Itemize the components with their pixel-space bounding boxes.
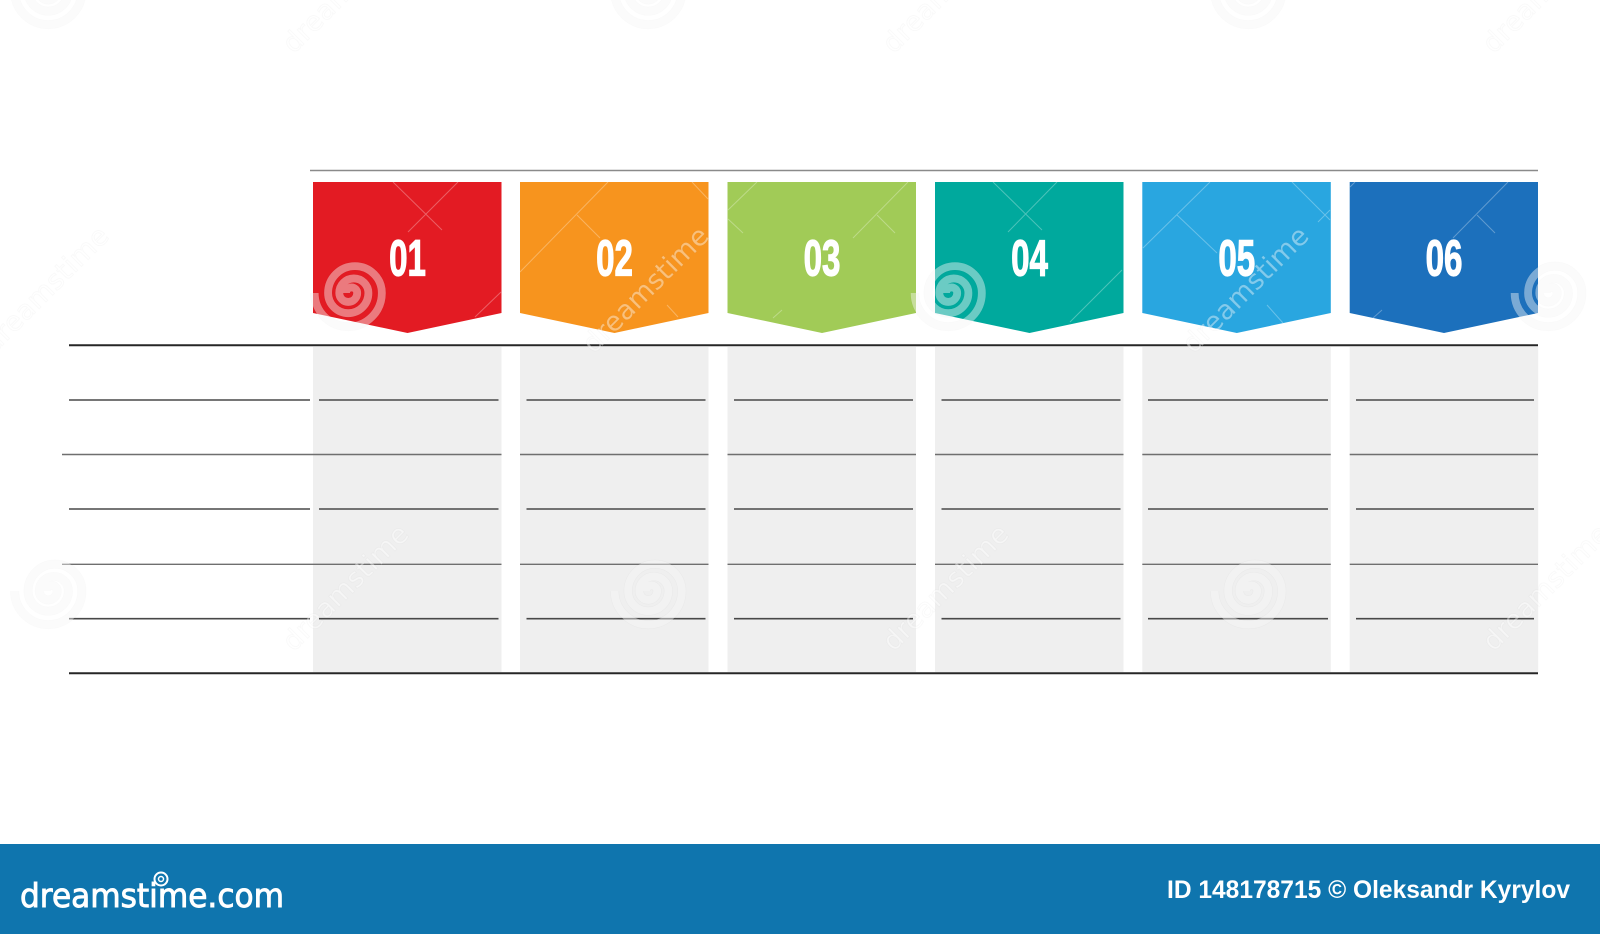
header: column 03 [728,182,916,333]
header: column 02: 02 [596,230,633,287]
header: column 05 [1142,182,1331,333]
panel: column backgrounds [313,347,1538,672]
header: column 01: 01 [389,230,426,287]
top header rule [310,170,1538,172]
watermark: dreamstime wordmarks: dreamstime [277,519,415,657]
watermark: dreamstime wordmarks: dreamstime [577,221,715,359]
header: column 03: 03 [804,230,840,287]
header: column 06 [1350,182,1538,333]
header: column 02 [520,182,708,333]
header: column 06: 06 [1426,230,1462,287]
header: column 05: 05 [1218,230,1255,287]
watermark: dreamstime wordmarks [0,0,1600,657]
header: column 04 [935,182,1124,333]
footer logo: dreamstime.com [20,876,284,915]
header: column 01 [313,182,502,333]
header: column 04: 04 [1011,230,1048,287]
watermark: spirals [15,0,1582,625]
watermark: dreamstime wordmarks: dreamstime [877,519,1015,657]
table rules [62,345,1538,673]
watermark: dreamstime wordmarks: dreamstime [1177,221,1315,359]
footer credit: ID 148178715 © Oleksandr Kyrylov [1167,876,1570,904]
footer bar [0,844,1600,934]
watermark: diagonal lines on headers [393,182,1508,323]
